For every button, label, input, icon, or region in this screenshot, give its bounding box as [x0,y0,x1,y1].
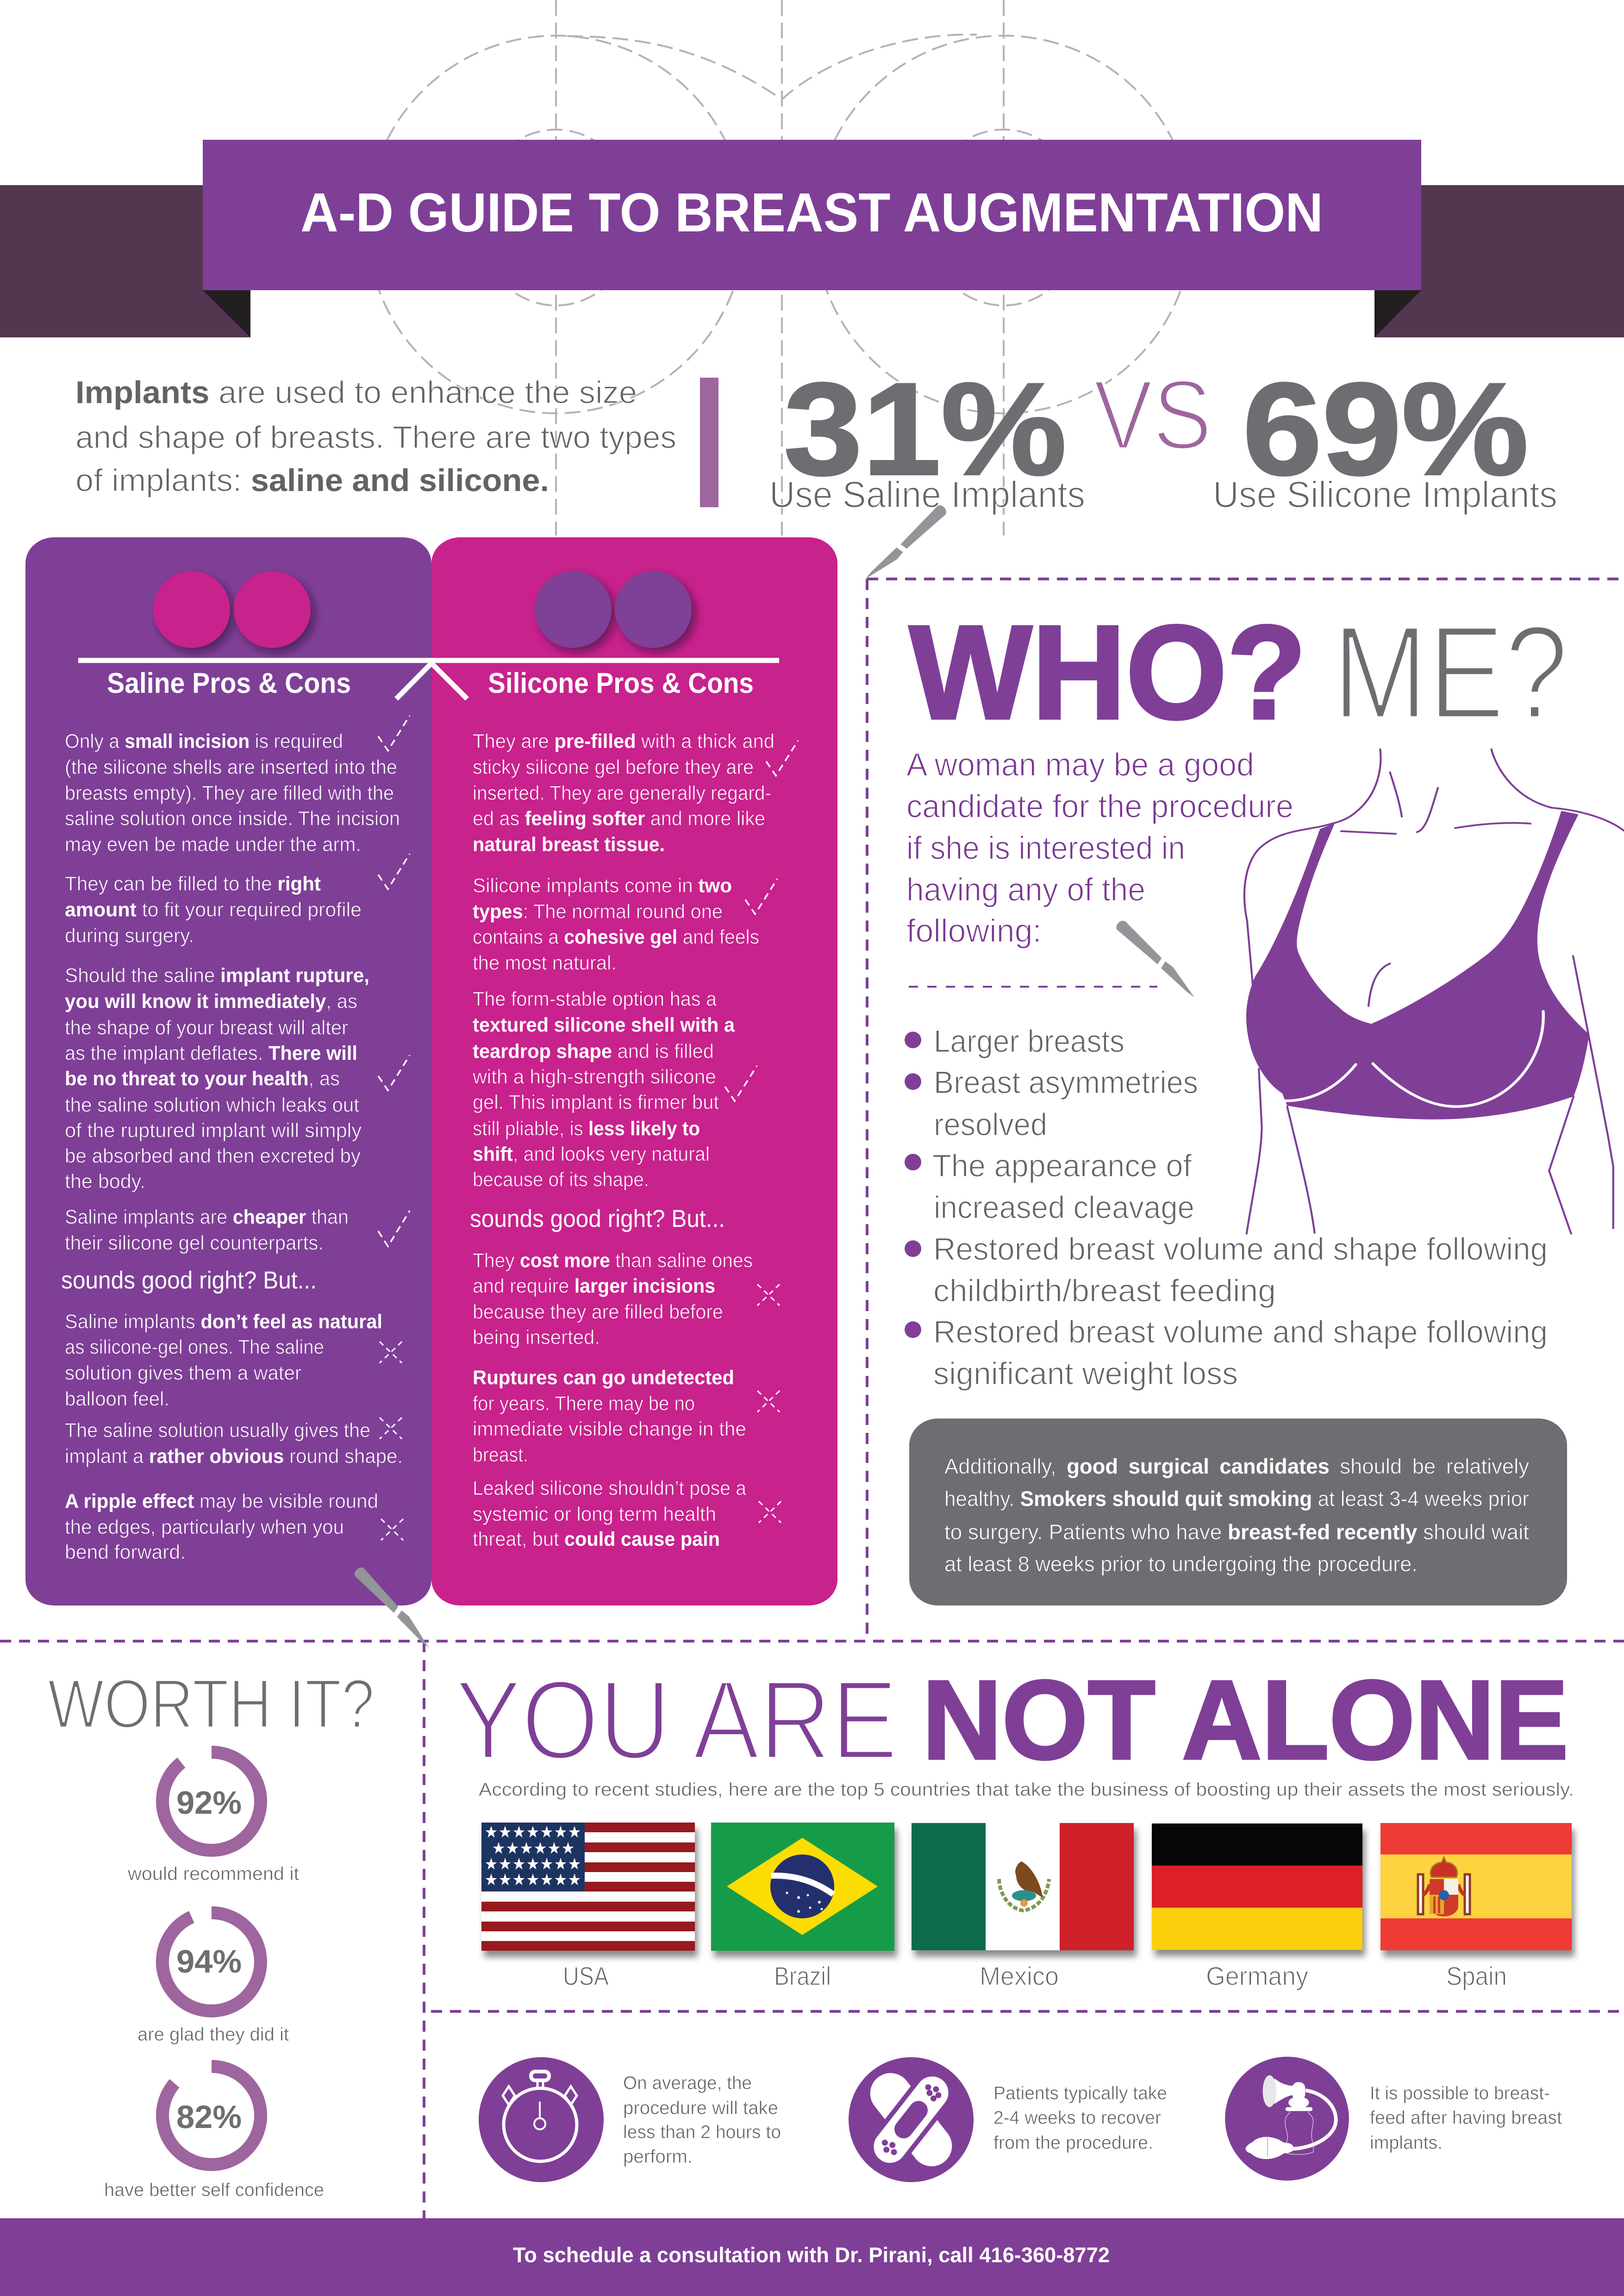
saline con: ripple effect: the edges, particularly when you [65,1516,344,1538]
icon: scalpel over panel [353,1565,436,1649]
silicone pro: pre-filled: sticky silicone gel before they are [473,756,754,778]
candidate bullet list: Breast asymmetries [934,1065,1198,1100]
silicone pro: two types: the most natural. [473,952,617,974]
silicone con: cost: being inserted. [473,1326,600,1349]
heading: silicone: Silicone Pros & Cons [488,667,754,699]
flag: USA [481,1823,695,1951]
candidate intro text: having any of the [906,871,1145,908]
saline pro: right amount: during surgery. [65,925,194,947]
flag: Mexico [912,1823,1134,1950]
saline pro: cheaper [65,1206,410,1254]
icon: crossed bandages [849,2057,974,2182]
silicone pro: two types [473,875,777,974]
silicone con: leaked silicone [473,1477,781,1550]
saline pro: rupture: the saline solution which leaks out [65,1094,359,1116]
heading: who me: WHO? [909,598,1306,747]
flag labels: Germany [1206,1961,1308,1991]
stat ring: 92%: 92% [176,1785,242,1821]
silicone con: ruptures: for years. There may be no [473,1393,695,1415]
icon: scalpel by list [1114,919,1201,999]
heading: who me [909,598,1568,747]
text: procedure time [623,2073,781,2167]
candidate bullet list: resolved [934,1107,1047,1142]
silicone pro: pre-filled: ed as feeling softer and more like [473,808,765,830]
text: recovery time: Patients typically take [993,2083,1167,2103]
saline pro: right amount: amount to fit your required profile [65,899,362,921]
saline pro: rupture: be no threat to your health, as [65,1068,340,1090]
saline con: ripple effect: bend forward. [65,1541,186,1563]
heading: who me: ME? [1332,598,1568,747]
stat ring: 94% [137,1913,289,2045]
saline pro: rupture: as the implant deflates. There will [65,1042,357,1064]
saline pro: rupture: you will know it immediately, as [65,990,357,1013]
text: procedure time: procedure will take [623,2098,778,2118]
VS label: VS [1093,360,1212,470]
candidate bullet list: increased cleavage [934,1190,1194,1225]
saline pro: rupture: Should the saline implant rupture, [65,964,369,987]
saline pro: small incision: breasts empty). They are filled with the [65,782,394,804]
text: procedure time: perform. [623,2147,693,2167]
stat ring: 94%: are glad they did it [137,2024,289,2045]
icon: silicone implants [535,571,692,648]
icon: saline implants [153,571,311,648]
saline con: round shape [65,1418,403,1468]
silicone con: leaked silicone: Leaked silicone shouldn’t pose a [473,1477,746,1500]
icon: breast pump [1225,2057,1349,2181]
saline pro: small incision: may even be made under the arm. [65,834,361,856]
candidate intro text: candidate for the procedure [906,788,1293,824]
text: recovery time [993,2083,1167,2153]
saline subheading: sounds good right? But... [61,1267,317,1294]
saline con: ripple effect: A ripple effect may be visible round [65,1490,378,1512]
saline pro: small incision [65,716,410,856]
text: procedure time: less than 2 hours to [623,2122,781,2142]
icon: scalpel top [864,504,949,586]
saline con: round shape: implant a rather obvious round shape. [65,1445,403,1468]
candidate bullet list [905,1024,1548,1391]
saline pro: right amount: They can be filled to the right [65,873,321,895]
saline con: round shape: The saline solution usually gives the [65,1419,370,1442]
callout: surgical candidates: to surgery. Patients who have breast-fed recently should wait [944,1520,1529,1544]
silicone pro: pre-filled: They are pre-filled with a thick and [473,730,775,753]
saline con: not natural: as silicone-gel ones. The saline [65,1336,324,1358]
silicone pro: form-stable: The form-stable option has a [473,988,717,1010]
candidate bullet list: Restored breast volume and shape following [933,1232,1548,1267]
silicone con: ruptures: Ruptures can go undetected [473,1367,734,1389]
candidate intro text: if she is interested in [906,830,1185,866]
silicone con: leaked silicone: systemic or long term health [473,1503,716,1525]
text: top 5 countries: According to recent studies, here are the top 5 countries that take the business of boosting up their assets the most seriously. [479,1780,1574,1800]
saline con: not natural: Saline implants don’t feel as natural [65,1311,382,1333]
stat: 31% saline: 31% [784,356,1067,503]
stat: 69% silicone: 69% [1243,356,1529,503]
flag labels: Mexico [980,1961,1059,1991]
flag labels: USA [563,1961,609,1991]
saline pro: rupture: the shape of your breast will alter [65,1017,348,1039]
silicone con: ruptures: immediate visible change in the [473,1418,746,1440]
panel: silicone pros and cons [431,537,837,1605]
intro text [75,375,676,498]
footer band: To schedule a consultation with Dr. Pirani, call 416-360-8772 [513,2243,1110,2267]
saline pro: rupture: of the ruptured implant will simply [65,1120,362,1142]
stat ring: 94%: 94% [176,1943,242,1979]
saline con: not natural: solution gives them a water [65,1362,301,1384]
text: breast feeding [1370,2083,1562,2153]
flag labels: Brazil [774,1961,831,1991]
heading: worth it: WORTH IT? [48,1665,375,1742]
title: A-D GUIDE TO BREAST AUGMENTATION [300,182,1323,243]
saline pro: small incision: saline solution once inside. The incision [65,808,400,830]
silicone pro: form-stable: because of its shape. [473,1169,649,1191]
silicone pro: form-stable: teardrop shape and is filled [473,1040,714,1063]
saline con: not natural [65,1311,402,1410]
saline pro: cheaper: their silicone gel counterparts. [65,1232,324,1254]
candidate bullet list: Larger breasts [934,1024,1124,1059]
callout: surgical candidates: at least 8 weeks prior to undergoing the procedure. [944,1552,1418,1576]
stat: 69% silicone: Use Silicone Implants [1213,474,1557,515]
panel: saline pros and cons [25,537,431,1605]
candidate bullet list: Restored breast volume and shape following [933,1314,1548,1350]
silicone con: cost: and require larger incisions [473,1275,715,1297]
saline con: ripple effect [65,1490,403,1563]
ribbon banner with title [0,140,1624,337]
saline pro: small incision: (the silicone shells are inserted into the [65,756,397,778]
silicone pro: pre-filled [473,730,798,856]
silicone con: leaked silicone: threat, but could cause pain [473,1528,720,1550]
silicone con: cost: They cost more than saline ones [473,1250,753,1272]
flag: Spain [1380,1823,1572,1950]
flag: Germany [1152,1823,1362,1950]
flag labels [563,1961,1507,1991]
candidate intro text: A woman may be a good [906,747,1254,783]
candidate bullet list: childbirth/breast feeding [933,1273,1276,1308]
silicone pro: two types: contains a cohesive gel and feels [473,926,759,948]
silicone pro: two types: Silicone implants come in two [473,875,732,897]
saline pro: cheaper: Saline implants are cheaper than [65,1206,349,1228]
saline pro: rupture: the body. [65,1170,145,1193]
text: procedure time: On average, the [623,2073,752,2093]
silicone pro: form-stable [472,988,757,1191]
flag labels: Spain [1446,1961,1507,1991]
text: recovery time: 2-4 weeks to recover [993,2108,1161,2128]
saline pro: small incision: Only a small incision is required [65,730,343,753]
flag: Brazil [711,1823,894,1951]
footer band [0,2218,1624,2296]
silicone pro: form-stable: textured silicone shell with a [473,1014,735,1036]
saline con: not natural: balloon feel. [65,1388,169,1410]
heading: you are not alone: NOT ALONE [922,1657,1568,1783]
candidate bullet list: significant weight loss [933,1356,1238,1391]
stat ring: 92%: would recommend it [127,1864,299,1884]
text: breast feeding: It is possible to breast- [1370,2083,1550,2103]
text: breast feeding: feed after having breast [1370,2108,1562,2128]
intro text: Implants are used to enhance the size [75,375,637,410]
saline pro: rupture [65,964,410,1193]
divider line and chevron across panels [78,660,779,699]
silicone pro: two types: types: The normal round one [473,901,723,923]
figure: torso in bra [1244,749,1624,1234]
text: breast feeding: implants. [1370,2133,1443,2153]
silicone subheading: sounds good right? But... [470,1205,725,1232]
text: recovery time: from the procedure. [993,2133,1153,2153]
stat: 31% saline: Use Saline Implants [769,474,1085,515]
silicone con: cost [473,1250,780,1349]
callout: surgical candidates [909,1419,1567,1605]
heading: you are not alone [455,1657,1568,1783]
silicone pro: form-stable: gel. This implant is firmer but [473,1091,719,1114]
callout: surgical candidates: healthy. Smokers should quit smoking at least 3-4 weeks prior [944,1487,1529,1511]
callout: surgical candidates: Additionally, good surgical candidates should be relatively [944,1454,1529,1478]
intro text: of implants: saline and silicone. [75,463,549,498]
candidate intro text: following: [906,913,1042,949]
silicone pro: form-stable: shift, and looks very natural [473,1143,710,1165]
silicone pro: form-stable: still pliable, is less likely to [473,1118,700,1140]
stat ring: 82% [104,2066,324,2200]
silicone con: cost: because they are filled before [473,1301,723,1323]
saline pro: right amount [65,854,410,947]
silicone pro: pre-filled: inserted. They are generally regard- [473,782,771,804]
silicone con: ruptures: breast. [473,1444,528,1466]
stat ring: 82%: have better self confidence [104,2180,324,2200]
saline pro: rupture: be absorbed and then excreted by [65,1145,361,1167]
stat ring: 92% [127,1752,299,1884]
intro text: and shape of breasts. There are two types [75,420,676,455]
heading: saline: Saline Pros & Cons [107,667,351,699]
icon: stopwatch [479,2057,604,2182]
silicone con: ruptures [473,1367,780,1466]
stat ring: 82%: 82% [176,2099,242,2135]
silicone pro: pre-filled: natural breast tissue. [473,834,665,856]
candidate intro text [906,747,1293,949]
divider bar [700,378,718,507]
heading: you are not alone: YOU ARE [455,1657,898,1783]
silicone pro: form-stable: with a high-strength silicone [472,1066,716,1088]
candidate bullet list: The appearance of [932,1148,1192,1183]
